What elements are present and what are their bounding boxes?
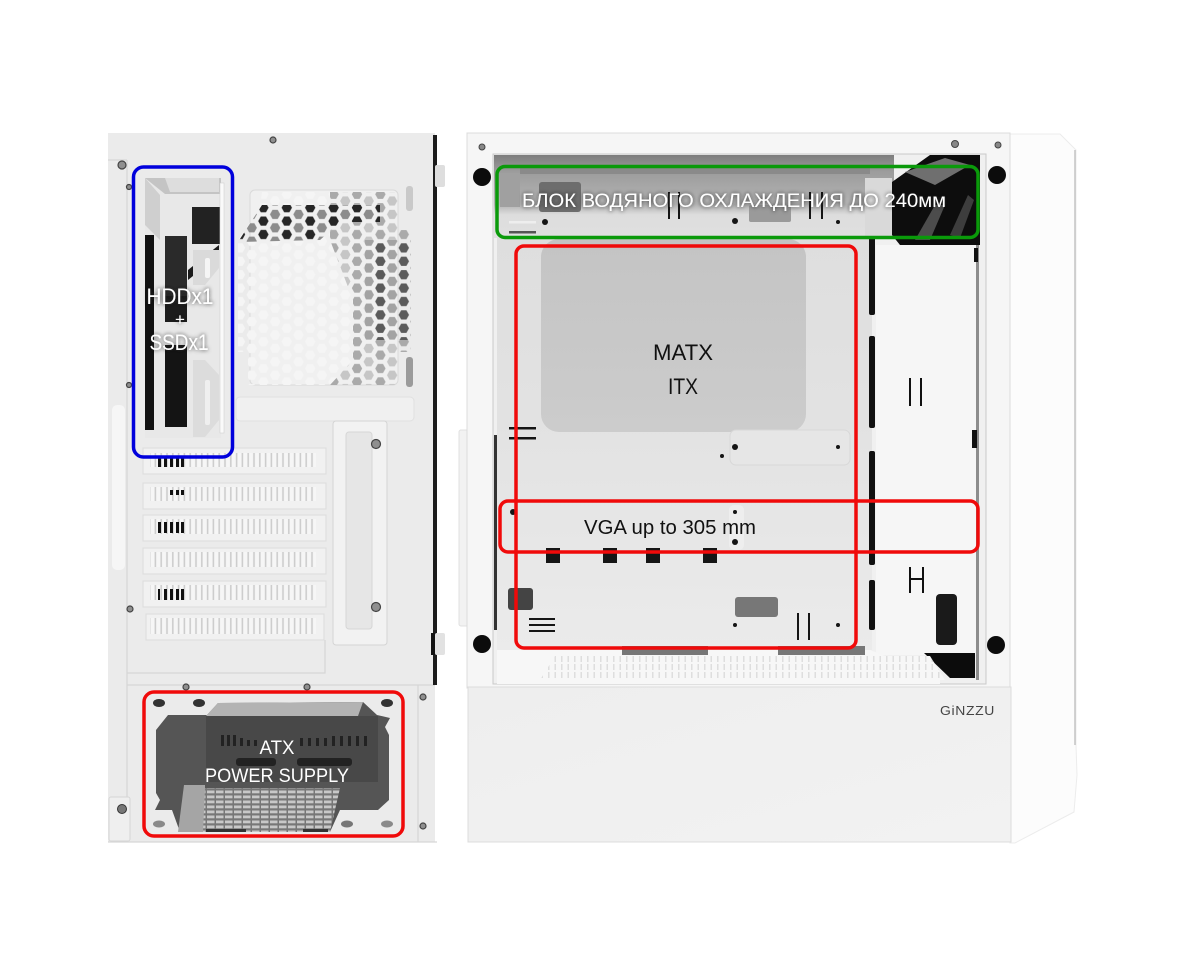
panel: power supply opening: [153, 699, 393, 832]
label: water cooling unit: БЛОК ВОДЯНОГО ОХЛАЖДЕНИЯ ДО 240мм: [522, 191, 946, 212]
vertical expansion bracket: [333, 421, 387, 645]
label: HDD + SSD: +: [175, 310, 185, 329]
panel: rear view of the case: [108, 133, 445, 842]
lower shroud: [468, 687, 1011, 842]
right cable compartment: [869, 222, 979, 680]
label: ATX power supply: POWER SUPPLY: [205, 766, 349, 787]
tray cut-out: [541, 239, 806, 432]
logo: Ginzzu: GiNZZU: [940, 703, 995, 718]
left bulge: [112, 405, 125, 570]
label: MATX / ITX: MATX: [653, 340, 713, 365]
callout: graphics card clearance: [500, 501, 978, 552]
label: VGA length: VGA up to 305 mm: [584, 517, 756, 539]
black gaps seen through slots: [158, 458, 184, 600]
label: MATX / ITX: ITX: [668, 374, 698, 399]
horizontal stamped ridge: [236, 397, 414, 421]
top bay: [494, 155, 894, 238]
rear screws: [118, 137, 426, 829]
label: HDD + SSD: SSDx1: [150, 330, 208, 355]
callout: water cooling: [497, 166, 978, 238]
left wall dark edge: [494, 435, 497, 630]
label: ATX power supply: [205, 738, 349, 787]
case frame: [467, 133, 1010, 688]
PCI slot covers: [143, 448, 326, 640]
callout: storage bays: [134, 167, 232, 457]
motherboard tray: [497, 180, 872, 650]
bottom floor mesh: [497, 646, 945, 684]
front curved bezel: [1010, 134, 1077, 843]
raised plate: [730, 430, 850, 465]
top frame screws: [479, 140, 1001, 150]
label: ATX power supply: ATX: [260, 738, 295, 759]
upper ventilation plate: [238, 186, 413, 387]
back-panel frame lines and corners: [108, 160, 437, 842]
corner foot tab: [109, 797, 130, 841]
label: MATX / ITX: [653, 340, 713, 399]
callout: power supply: [144, 692, 403, 836]
interior: [493, 154, 986, 684]
panel: HDD/SSD cage opening: [145, 178, 224, 438]
radiator fan area: [865, 155, 980, 245]
black right edge: [431, 135, 445, 685]
callout: motherboard formats: [516, 246, 856, 648]
label: HDD + SSD: [146, 284, 214, 355]
large black corner screws: [473, 166, 1006, 654]
panel: front view of the case: [459, 133, 1077, 843]
label: HDD + SSD: HDDx1: [146, 284, 214, 309]
tray stamped holes and marks: [508, 192, 840, 640]
side tabs: [459, 430, 469, 626]
